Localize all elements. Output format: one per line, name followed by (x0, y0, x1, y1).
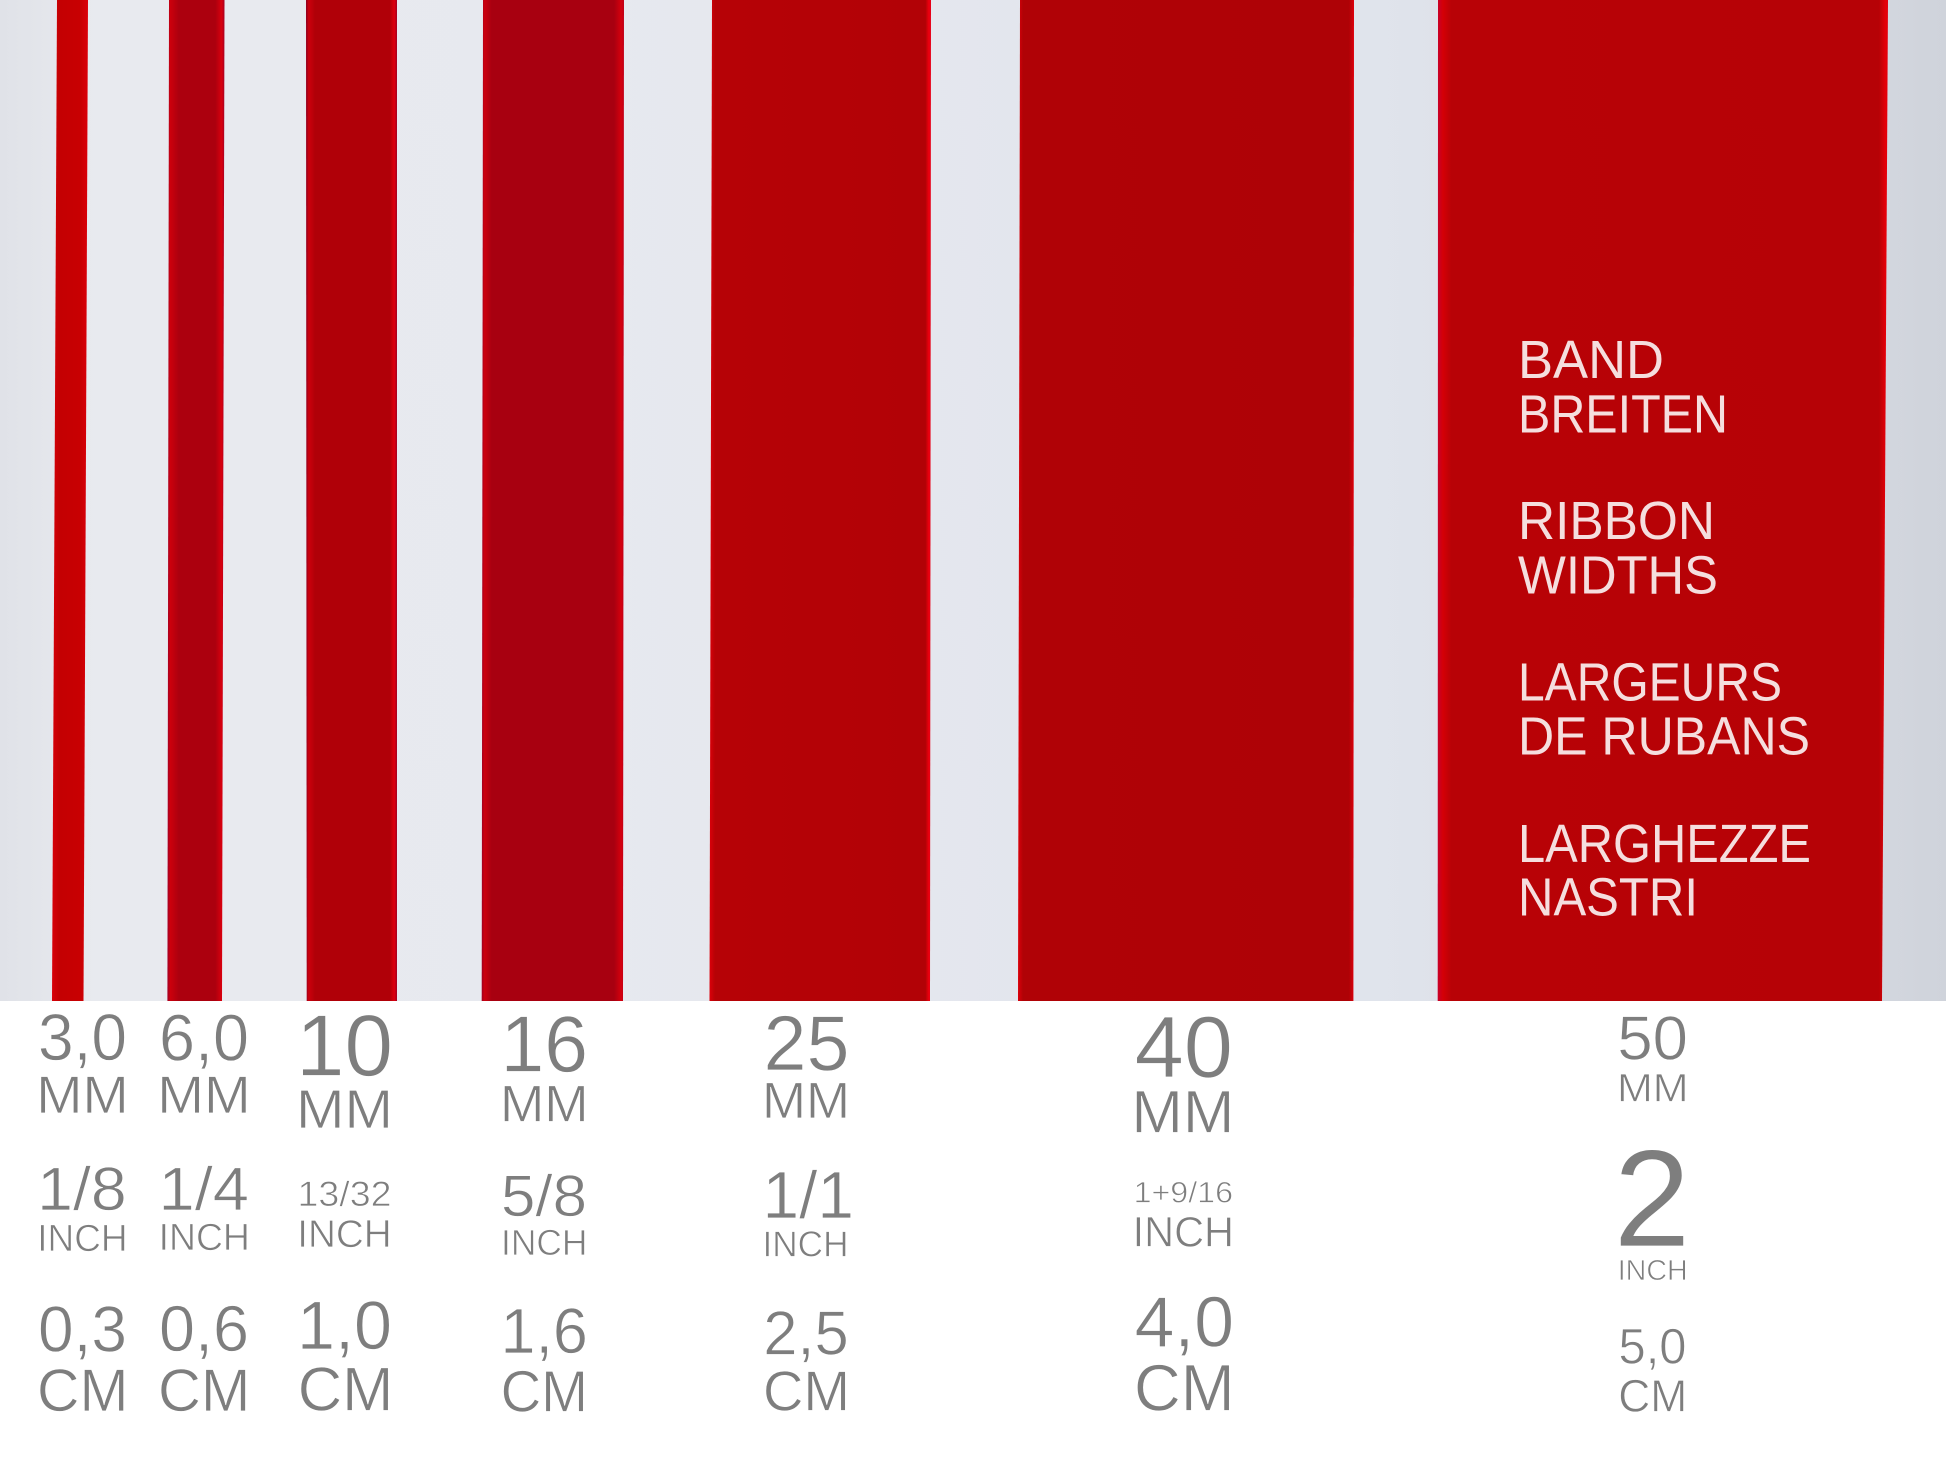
column: 25 mm sizes: CM (763, 1360, 850, 1424)
column: 40 mm sizes: CM (1134, 1351, 1235, 1425)
column: 16 mm sizes: CM (501, 1360, 588, 1425)
column: 25 mm sizes: INCH (762, 1224, 848, 1265)
column: 3 mm sizes: 0,3 (38, 1292, 127, 1366)
column: 50 mm sizes: 2 (1614, 1122, 1690, 1276)
title: multilingual ribbon widths heading (1518, 330, 1811, 928)
column: 25 mm sizes: 2,5 (763, 1299, 849, 1368)
title: multilingual ribbon widths heading: BAND (1518, 330, 1664, 390)
column: 16 mm sizes: INCH (501, 1222, 587, 1263)
column: 10 mm sizes: 13/32 (298, 1175, 392, 1214)
column: 50 mm sizes: 5,0 (1618, 1318, 1686, 1374)
column: 40 mm sizes: INCH (1133, 1209, 1234, 1257)
column: 16 mm sizes (500, 1000, 589, 1425)
column: 50 mm sizes: 50 (1617, 1004, 1688, 1073)
column: 50 mm sizes: MM (1617, 1067, 1689, 1111)
ribbon: 50 mm (1438, 0, 1888, 1001)
column: 16 mm sizes: 1,6 (500, 1295, 588, 1367)
panel: ribbon photograph (0, 0, 1946, 1001)
ribbon: 6 mm (167, 0, 224, 1001)
column: 6 mm sizes: 0,6 (159, 1292, 249, 1365)
column: 3 mm sizes: 3,0 (38, 1000, 127, 1074)
column: 3 mm sizes: INCH (37, 1218, 128, 1260)
title: multilingual ribbon widths heading: LARGHEZZE (1518, 814, 1811, 874)
column: 25 mm sizes: 1/1 (762, 1158, 854, 1233)
ribbon: 40 mm (1018, 0, 1354, 1001)
column: 10 mm sizes: 10 (296, 998, 393, 1095)
column: 40 mm sizes: 1+9/16 (1134, 1177, 1233, 1210)
column: 6 mm sizes (157, 1000, 251, 1424)
ribbon: 3 mm (52, 0, 88, 1001)
title: multilingual ribbon widths heading: RIBBON (1518, 491, 1715, 551)
column: 6 mm sizes: MM (157, 1066, 251, 1125)
column: 16 mm sizes: 5/8 (501, 1164, 587, 1229)
title: multilingual ribbon widths heading: LARGEURS (1518, 653, 1782, 713)
ribbon: 16 mm (482, 0, 624, 1001)
column: 3 mm sizes: CM (37, 1357, 128, 1424)
column: 10 mm sizes: MM (296, 1078, 393, 1140)
column: 16 mm sizes: 16 (500, 1000, 588, 1089)
column: 50 mm sizes: CM (1618, 1371, 1687, 1422)
column: 40 mm sizes: MM (1131, 1079, 1234, 1146)
column: 50 mm sizes (1614, 1004, 1690, 1422)
title: multilingual ribbon widths heading: BREITEN (1518, 385, 1728, 445)
column: 16 mm sizes: MM (500, 1076, 589, 1134)
ribbon: 25 mm (710, 0, 931, 1001)
column: 10 mm sizes: INCH (297, 1213, 392, 1256)
column: 6 mm sizes: CM (158, 1357, 250, 1424)
title: multilingual ribbon widths heading: WIDTHS (1518, 545, 1718, 605)
column: 10 mm sizes (296, 998, 393, 1425)
column: 25 mm sizes: MM (762, 1072, 850, 1129)
column: 3 mm sizes: MM (36, 1066, 129, 1125)
ribbon: 10 mm (306, 0, 397, 1001)
column: 6 mm sizes: 1/4 (158, 1155, 249, 1223)
column: 40 mm sizes: 4,0 (1135, 1284, 1234, 1363)
column: 40 mm sizes: 40 (1135, 999, 1233, 1096)
column: 10 mm sizes: CM (298, 1356, 393, 1425)
column: 25 mm sizes: 25 (764, 999, 850, 1087)
title: multilingual ribbon widths heading: NASTRI (1518, 868, 1698, 928)
column: 3 mm sizes: 1/8 (37, 1155, 127, 1223)
column: 10 mm sizes: 1,0 (297, 1287, 392, 1364)
column: 25 mm sizes (762, 999, 854, 1424)
column: 50 mm sizes: INCH (1618, 1255, 1688, 1287)
column: 40 mm sizes (1131, 999, 1235, 1425)
column: 6 mm sizes: 6,0 (159, 1000, 249, 1074)
column: 3 mm sizes (36, 1000, 129, 1424)
title: multilingual ribbon widths heading: DE RUBANS (1518, 706, 1810, 766)
column: 6 mm sizes: INCH (159, 1217, 250, 1259)
